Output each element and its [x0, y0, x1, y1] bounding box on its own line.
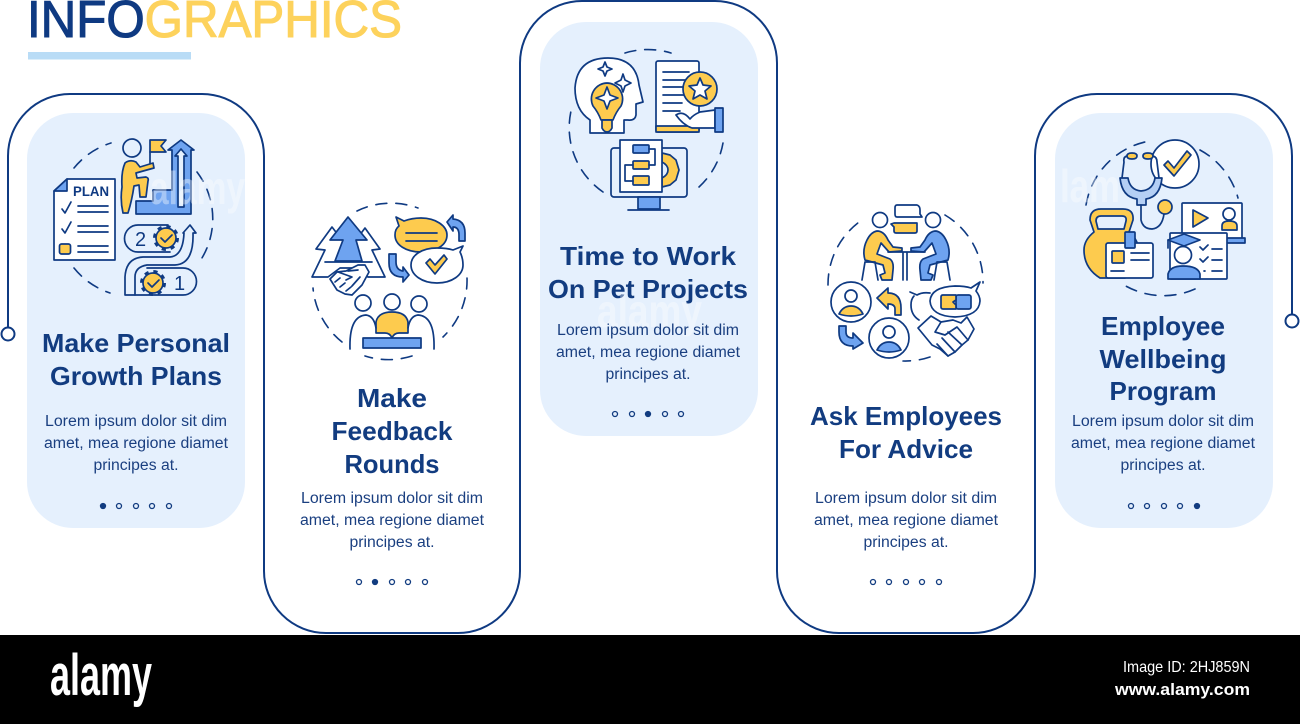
heading: Employee	[1101, 311, 1225, 341]
pagination dots	[356, 580, 428, 584]
body text: amet, mea regione diamet	[300, 512, 485, 529]
body text: amet, mea regione diamet	[44, 435, 229, 452]
heading: Growth Plans	[50, 361, 222, 391]
heading: Make Personal	[42, 328, 230, 358]
body text: amet, mea regione diamet	[814, 512, 999, 529]
heading: Program	[1110, 376, 1216, 406]
heading	[42, 328, 230, 391]
heading	[810, 401, 1002, 464]
body text	[44, 413, 229, 474]
panel: ask employees	[810, 205, 1002, 584]
heading	[1100, 311, 1226, 406]
heading: On Pet Projects	[548, 274, 748, 304]
panel: personal growth plans	[42, 139, 245, 508]
pagination dots	[1128, 504, 1200, 508]
heading: Time to Work	[560, 241, 737, 271]
body text: amet, mea regione diamet	[1071, 435, 1256, 452]
icon: arrows, bubbles, team	[312, 203, 467, 360]
heading: For Advice	[839, 434, 973, 464]
heading: Feedback	[332, 416, 453, 446]
body text: principes at.	[606, 366, 690, 383]
body text	[556, 322, 741, 383]
footer logo: alamy	[50, 643, 152, 708]
pagination dots	[612, 412, 684, 416]
panel: feedback rounds	[300, 203, 485, 584]
body text: Lorem ipsum dolor sit dim	[45, 413, 227, 430]
icon: stethoscope, kettlebell, learning	[1084, 140, 1245, 296]
body text	[1071, 413, 1256, 474]
body text	[300, 490, 485, 551]
pagination dots	[870, 580, 942, 584]
body text: Lorem ipsum dolor sit dim	[815, 490, 997, 507]
icon: plan, climbing person, road	[54, 139, 213, 295]
panel: employee wellbeing	[1060, 140, 1256, 508]
panel: pet projects	[548, 50, 748, 417]
light panel backgrounds	[27, 22, 1273, 528]
heading	[548, 241, 748, 304]
heading: Ask Employees	[810, 401, 1002, 431]
image id: Image ID: 2HJ859N	[1123, 659, 1250, 676]
body text: amet, mea regione diamet	[556, 344, 741, 361]
body text	[814, 490, 999, 551]
icon: plan, climbing person, road: 2	[135, 229, 146, 251]
body text: Lorem ipsum dolor sit dim	[557, 322, 739, 339]
website: www.alamy.com	[1114, 680, 1250, 699]
body text: principes at.	[94, 457, 178, 474]
footer bar	[0, 635, 1300, 724]
body text: principes at.	[1120, 457, 1206, 474]
panel: personal growth plans: alamy	[150, 162, 245, 214]
icon: idea head, document, monitor	[569, 50, 723, 210]
heading	[332, 383, 453, 479]
heading: Wellbeing	[1100, 344, 1226, 374]
icon: plan, climbing person, road: PLAN	[73, 184, 109, 199]
icon: plan, climbing person, road: 1	[174, 273, 185, 295]
panel: pet projects: alamy	[597, 285, 702, 337]
body text: principes at.	[350, 534, 434, 551]
heading: Make	[357, 383, 427, 413]
icon: meeting, profiles, handshake	[828, 205, 983, 361]
body text: principes at.	[864, 534, 948, 551]
heading: Rounds	[344, 449, 440, 479]
panel: employee wellbeing: lam	[1060, 160, 1120, 212]
pagination dots	[100, 504, 172, 508]
body text: Lorem ipsum dolor sit dim	[301, 490, 483, 507]
body text: Lorem ipsum dolor sit dim	[1072, 413, 1254, 430]
